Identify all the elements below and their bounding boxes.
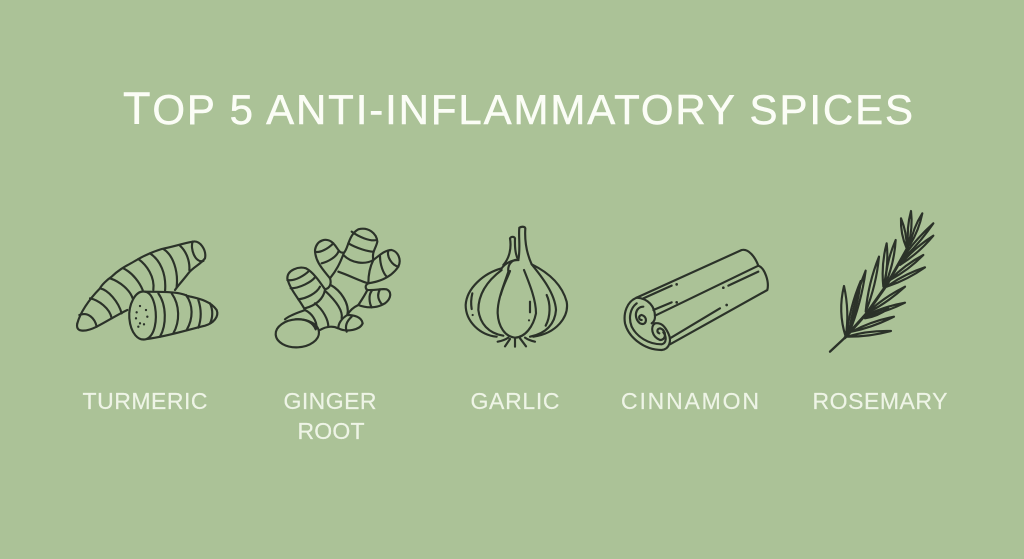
label: ginger root (284, 388, 376, 444)
label: ginger root: ROOT (298, 418, 364, 444)
icon: turmeric (77, 241, 217, 339)
icon: cinnamon stick (625, 250, 768, 350)
label: ginger root: GINGER (284, 388, 376, 414)
label: garlic: GARLIC (470, 388, 560, 414)
icon: garlic (466, 227, 567, 347)
label: cinnamon: CINNAMON (621, 388, 759, 414)
title: TOP 5 ANTI-INFLAMMATORY SPICES (123, 83, 913, 134)
icon: ginger root (275, 229, 400, 348)
label: rosemary: ROSEMARY (812, 388, 948, 414)
icon: rosemary sprig (830, 211, 933, 352)
label: turmeric: TURMERIC (82, 388, 208, 414)
